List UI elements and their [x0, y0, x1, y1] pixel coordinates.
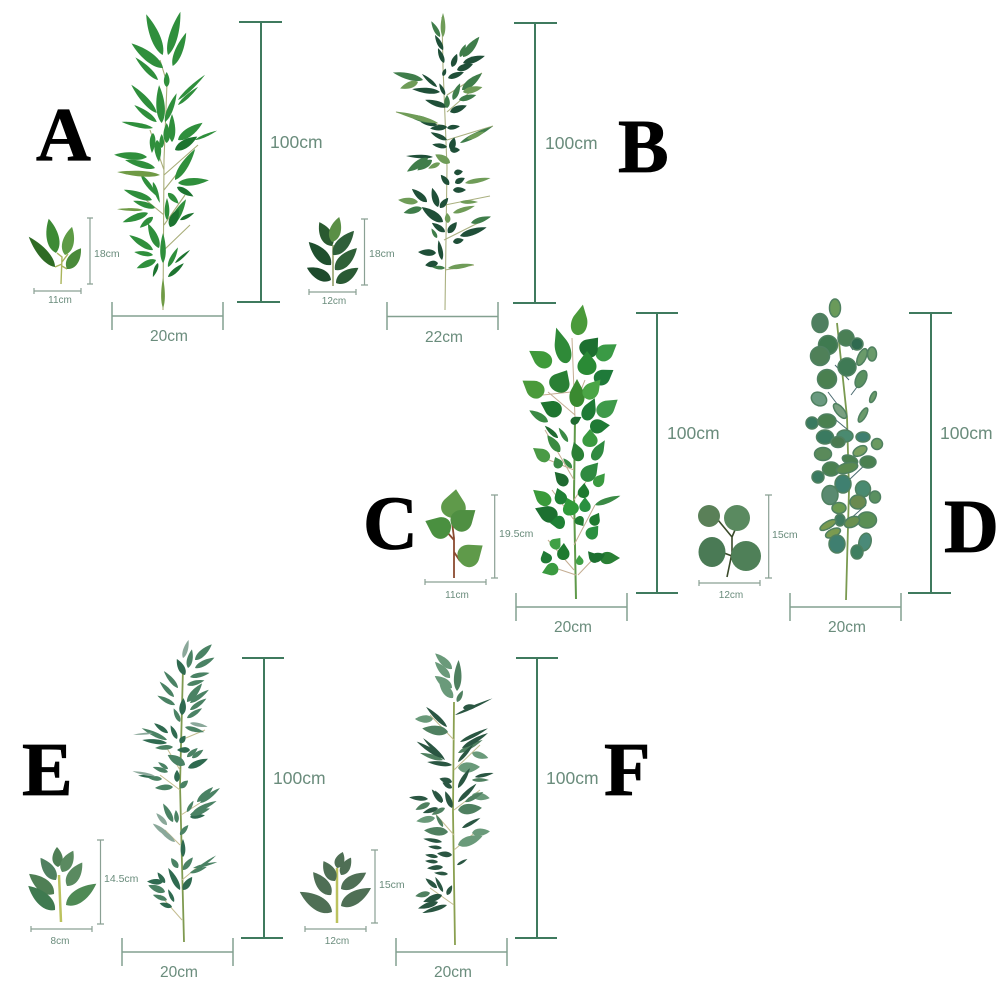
dimension: D height [908, 313, 952, 593]
letter B: B [618, 105, 669, 189]
plant F: willow stem [409, 651, 494, 945]
dimension: E width [122, 938, 233, 966]
label: B width: 22cm [425, 329, 463, 346]
label: F sprig width: 12cm [325, 936, 349, 947]
plant D: small leaf sprig [698, 505, 761, 577]
dimension: E sprig size [31, 840, 104, 932]
label: B height: 100cm [545, 133, 598, 153]
dimension: B height [513, 23, 557, 303]
dimension: A height [237, 22, 282, 302]
dimension: D sprig size [699, 495, 772, 586]
label: A sprig width: 11cm [48, 295, 72, 306]
dimension: B sprig size [309, 219, 368, 295]
plant C: small leaf sprig [421, 488, 489, 578]
dimension: C sprig size [425, 495, 498, 585]
label: A sprig height: 18cm [94, 248, 120, 260]
plant F: small leaf sprig [296, 850, 374, 923]
plant C: birch stem [518, 303, 623, 599]
label: A width: 20cm [150, 328, 188, 345]
dimension: C height [636, 313, 678, 593]
dimension: B width [387, 302, 498, 330]
plant B: small leaf sprig [304, 215, 362, 288]
dimension: A width [112, 302, 223, 330]
label: F sprig height: 15cm [379, 879, 405, 891]
letter E: E [22, 728, 73, 812]
label: C height: 100cm [667, 423, 720, 443]
label: C width: 20cm [554, 619, 592, 636]
label: C sprig height: 19.5cm [499, 528, 534, 540]
label: A height: 100cm [270, 132, 323, 152]
label: F height: 100cm [546, 768, 599, 788]
dimension: C width [516, 593, 627, 621]
letter C: C [363, 482, 418, 566]
plant B: bamboo stem [392, 13, 494, 310]
label: D width: 20cm [828, 619, 866, 636]
plant D: eucalyptus stem [806, 299, 882, 600]
label: E sprig height: 14.5cm [104, 873, 139, 885]
dimension: F sprig size [305, 850, 378, 932]
dimension: A sprig size [34, 218, 93, 294]
label: F width: 20cm [434, 964, 472, 981]
letter A: A [36, 93, 91, 177]
dimension: D width [790, 593, 901, 621]
dimension: E height [241, 658, 284, 938]
letter F: F [604, 728, 650, 812]
label: D height: 100cm [940, 423, 993, 443]
label: E sprig width: 8cm [51, 936, 69, 947]
label: B sprig height: 18cm [369, 248, 395, 260]
plant E: small leaf sprig [24, 847, 100, 922]
plant A: small leaf sprig [25, 217, 86, 284]
label: E width: 20cm [160, 964, 198, 981]
label: C sprig width: 11cm [445, 590, 469, 601]
plant A: bamboo stem [114, 11, 218, 310]
letter D: D [944, 485, 999, 569]
label: B sprig width: 12cm [322, 296, 346, 307]
dimension: F height [515, 658, 558, 938]
label: E height: 100cm [273, 768, 326, 788]
plant E: willow stem [132, 639, 221, 942]
dimension: F width [396, 938, 507, 966]
label: D sprig width: 12cm [719, 590, 743, 601]
label: D sprig height: 15cm [772, 529, 798, 541]
